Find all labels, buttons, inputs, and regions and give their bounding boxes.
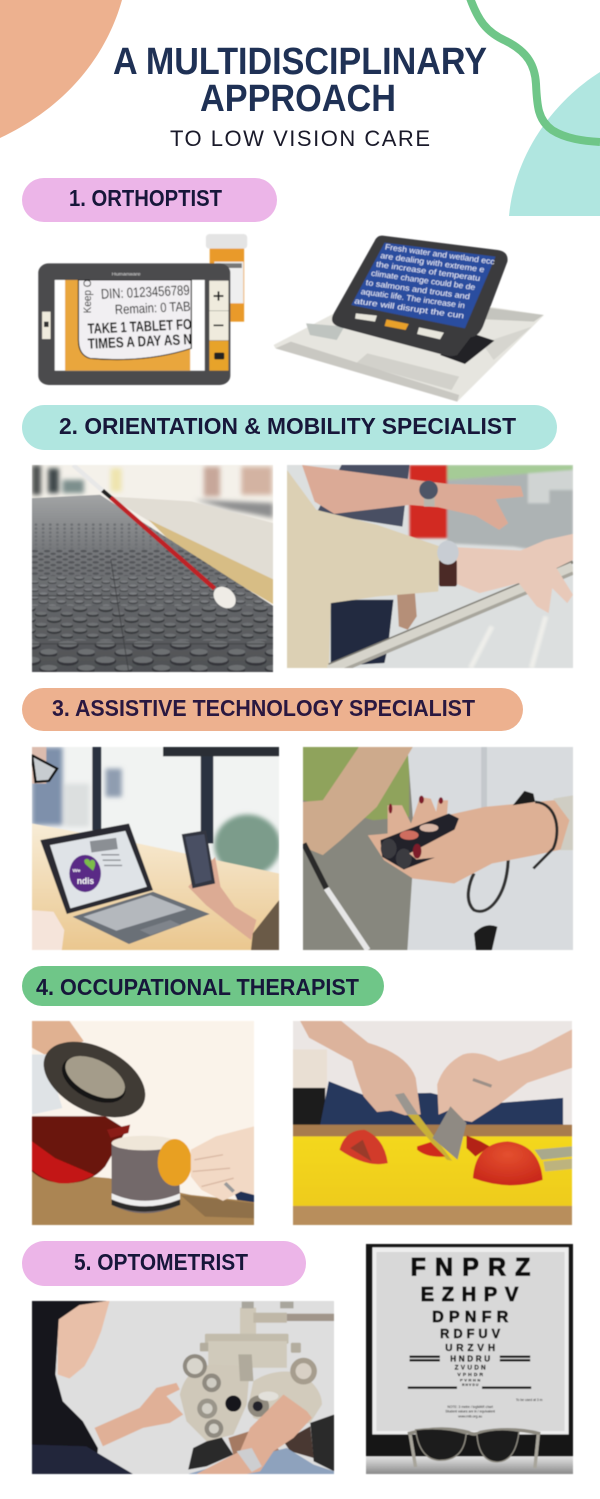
heading pill: occupational therapist — [22, 966, 384, 1006]
tablet magnifier: ature will disrupt the cun — [354, 296, 465, 320]
chart letters: RHVDU — [462, 1383, 479, 1387]
jeans — [320, 1081, 563, 1126]
title: APPROACH — [200, 78, 396, 120]
knife — [395, 1093, 466, 1161]
chart letters: RDFUV — [440, 1326, 501, 1341]
jug — [32, 1054, 130, 1183]
magnifier device with label: Keep O — [81, 279, 94, 313]
heading pill: optometrist — [22, 1241, 306, 1286]
photo: tablet and phone on desk — [32, 747, 280, 950]
chart footer: Student values are in / equivalent — [445, 1410, 495, 1414]
shirt — [407, 747, 573, 950]
photo: cutting tomato on yellow board — [293, 1021, 572, 1225]
chart letters: PVRHN — [460, 1377, 480, 1382]
tablet magnifier: to salmons and trouts and — [365, 278, 471, 301]
heading pill: orthoptist: 1. ORTHOPTIST — [69, 185, 222, 211]
sunglasses — [408, 1429, 540, 1468]
cane — [304, 844, 368, 950]
bracelet — [533, 802, 557, 868]
chart rules — [408, 1356, 531, 1389]
photo: handheld magnifiers — [38, 234, 544, 402]
board — [293, 1125, 572, 1137]
magnifier device — [380, 814, 459, 869]
handrail — [329, 562, 573, 675]
tactile paving — [32, 495, 273, 672]
keyboard — [73, 892, 210, 944]
magnifier device with label: DIN: 0123456789 — [101, 283, 190, 303]
chart letters: HNDRU — [450, 1355, 490, 1363]
chart letters: FNPRZ — [411, 1254, 530, 1281]
chart letters: ZVUDN — [455, 1365, 486, 1371]
chart letters: VPHDR — [457, 1372, 483, 1378]
magnifier device with label: Remain: 0 TAB — [115, 300, 191, 318]
orange indicator — [158, 1139, 192, 1186]
heading pill: orientation and mobility specialist: 2. ORIENTATION & MOBILITY SPECIALIST — [59, 413, 516, 439]
tomato pieces — [340, 1130, 543, 1185]
decoration: teal blob — [509, 72, 600, 216]
tablet magnifier: aquatic life. The increase in — [360, 287, 466, 310]
magnifier device with label: TIMES A DAY AS N — [87, 332, 192, 353]
tablet magnifier: are dealing with extreme e — [380, 251, 485, 274]
heading pill: orthoptist — [22, 178, 277, 222]
hand — [368, 797, 573, 883]
white cane — [73, 465, 240, 612]
beige jacket — [287, 470, 440, 668]
title — [113, 41, 487, 120]
chart footer: www.rnib.org.au — [458, 1414, 482, 1418]
table — [32, 1171, 254, 1225]
nails — [389, 796, 443, 858]
decoration: green wave — [470, 0, 600, 142]
tablet magnifier: the increase of temperatu — [375, 259, 481, 283]
tablet magnifier: Fresh water and wetland ecc — [384, 242, 496, 266]
heading pill: assistive technology specialist — [22, 688, 523, 731]
phoropter — [180, 1302, 334, 1441]
chart footer: To be used at 3 m — [516, 1398, 543, 1402]
mug — [112, 1136, 180, 1213]
heading pill: optometrist: 5. OPTOMETRIST — [74, 1249, 248, 1275]
arms and hands — [300, 1021, 572, 1122]
other arm — [303, 747, 413, 855]
hand — [191, 1126, 254, 1201]
platform — [109, 496, 273, 604]
photo: eye chart with sunglasses — [366, 1244, 573, 1474]
subtitle: TO LOW VISION CARE — [170, 126, 430, 151]
tablet — [40, 824, 153, 914]
photo: hand with handheld magnifier device — [303, 747, 573, 950]
blurred station background — [32, 465, 273, 518]
chart letters: DPNFR — [432, 1308, 509, 1326]
heading pill: occupational therapist: 4. OCCUPATIONAL THERAPIST — [36, 974, 359, 1000]
lanyard — [468, 860, 508, 950]
decoration: peach blob — [0, 0, 122, 138]
patient and chair — [188, 1415, 334, 1474]
chart letters: EZHPV — [421, 1284, 519, 1306]
magnifier device with label — [38, 263, 230, 385]
blurred background — [410, 465, 573, 668]
desk — [32, 824, 279, 950]
hand on phoropter — [197, 1395, 312, 1474]
tablet: ndis — [77, 876, 94, 887]
lid — [30, 1026, 159, 1133]
heading pill: orientation and mobility specialist — [22, 405, 557, 450]
thumb over device — [409, 827, 496, 859]
chart letters — [411, 1254, 530, 1387]
chart footer — [445, 1398, 543, 1418]
person in dark shirt — [316, 465, 417, 666]
tablet magnifier — [332, 236, 508, 364]
hand holding phone — [182, 830, 279, 950]
blurred window background — [32, 747, 280, 876]
glasses — [32, 747, 57, 784]
foreground hand — [32, 910, 64, 950]
photo: white cane on tactile paving — [32, 465, 273, 672]
photo: optometrist with phoropter — [32, 1301, 334, 1474]
magnifier device with label: Humanware — [112, 272, 141, 278]
tongs — [534, 1146, 572, 1171]
photo: pouring tea with liquid level indicator — [30, 1021, 254, 1225]
chart footer: NOTE: 3 metre / logMAR chart — [447, 1405, 493, 1409]
pill bottle — [206, 234, 247, 322]
lower arm with watch — [437, 534, 573, 613]
title: A MULTIDISCIPLINARY — [113, 41, 487, 83]
photo: guiding arms on handrail — [287, 465, 573, 675]
optometrist — [32, 1301, 183, 1474]
tablet: We — [73, 868, 81, 874]
tablet magnifier: climate change could be de — [370, 268, 476, 292]
chart letters: URZVH — [445, 1343, 495, 1354]
newspaper — [274, 305, 544, 402]
magnifier device with label: TAKE 1 TABLET FO — [87, 317, 192, 337]
upper arm with watch — [302, 465, 524, 530]
heading pill: assistive technology specialist: 3. ASSISTIVE TECHNOLOGY SPECIALIST — [52, 695, 475, 721]
